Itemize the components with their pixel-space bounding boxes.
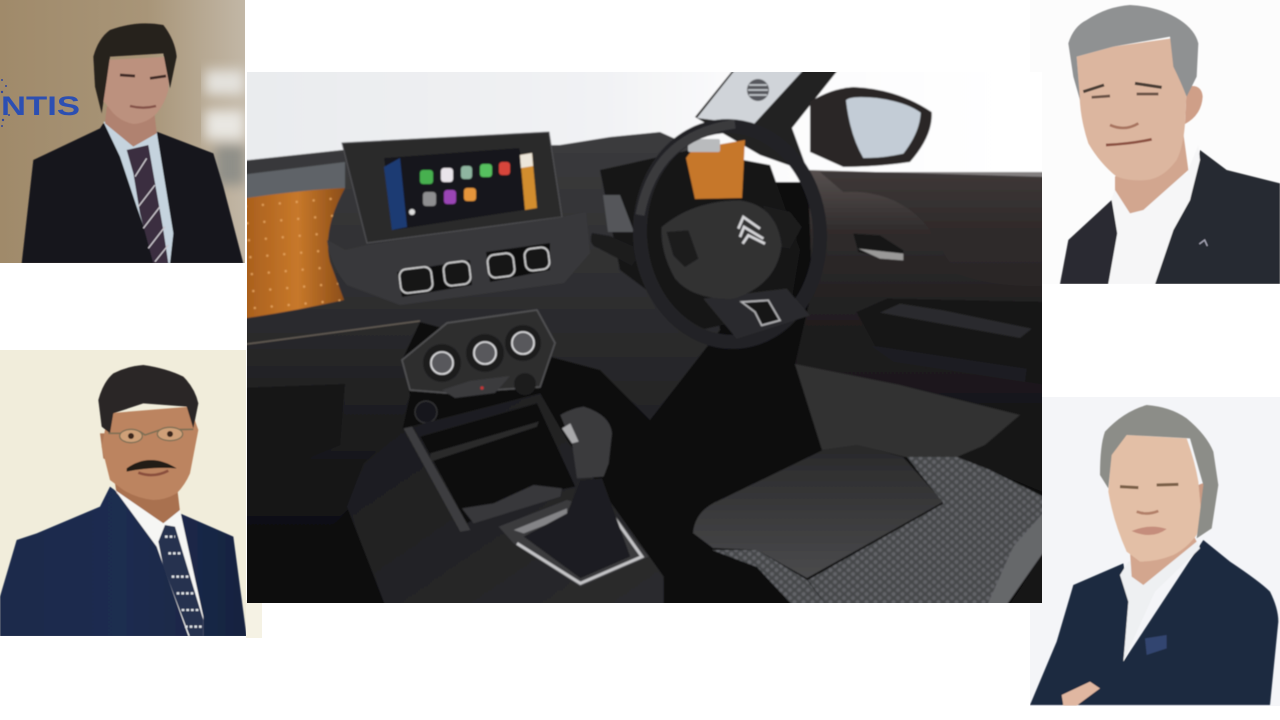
- button: [514, 373, 536, 395]
- glovebox: [240, 384, 345, 485]
- shirt: [1108, 145, 1200, 284]
- air vents: [397, 243, 550, 297]
- tie: [158, 525, 203, 637]
- console tray: [420, 403, 575, 523]
- logo text: NTIS: [1, 91, 80, 121]
- jacket right: [1155, 150, 1280, 284]
- lower spoke: [703, 289, 810, 339]
- orange trim behind wheel: [686, 140, 745, 199]
- wing mirror: [810, 87, 932, 167]
- tie: [127, 145, 168, 263]
- window switches: [880, 304, 1032, 338]
- hair: [1068, 5, 1198, 100]
- cup holder: [462, 485, 562, 523]
- pocket square: [1145, 635, 1167, 655]
- logo dots: [1, 79, 10, 127]
- seat leather: [693, 445, 943, 578]
- trim line: [240, 321, 420, 345]
- upper dashboard: [240, 132, 720, 420]
- mouth: [1106, 139, 1152, 145]
- lower left dashboard: [240, 322, 420, 560]
- hazard switch: [442, 376, 510, 398]
- a-pillar: [695, 65, 842, 172]
- hair: [1100, 405, 1218, 538]
- grey dash strip: [240, 162, 345, 199]
- icon: speaker grille: [747, 79, 769, 101]
- mirror glass: [846, 97, 921, 158]
- shirt: [103, 122, 173, 263]
- hair: [93, 23, 177, 113]
- door armrest: [857, 299, 1050, 385]
- eyes: [120, 75, 166, 78]
- icon: chevron logo: [738, 217, 765, 244]
- gear knob: [560, 407, 612, 478]
- shirt: [115, 490, 203, 636]
- touchscreen: [342, 132, 562, 243]
- cluster and wheel backdrop: [600, 150, 800, 330]
- mouth: [138, 471, 168, 475]
- photo: bottom right executive: [1030, 397, 1280, 706]
- hair: [98, 365, 198, 433]
- climate control panel: [402, 310, 555, 423]
- eyes and brows: [1083, 83, 1162, 92]
- seat fabric: [808, 457, 1050, 610]
- photo: car interior: [240, 65, 1050, 610]
- hub: [661, 200, 782, 299]
- door handle recess: [853, 234, 903, 260]
- left switches: [667, 230, 698, 267]
- neck: [115, 483, 180, 523]
- face: [1077, 38, 1187, 180]
- nose shadow: [1137, 511, 1158, 514]
- glasses: [108, 429, 193, 435]
- ear: [1185, 86, 1203, 124]
- seat: [693, 445, 1050, 610]
- jacket: [1030, 540, 1278, 705]
- hand and cuff: [1062, 682, 1100, 706]
- app icons: [420, 170, 433, 184]
- suit: [22, 123, 243, 263]
- face: [1108, 435, 1202, 562]
- moustache: [127, 460, 177, 472]
- badge: [1199, 240, 1207, 246]
- gear bezel: [499, 500, 649, 587]
- face: [102, 407, 198, 500]
- ear: [100, 433, 108, 460]
- seat bolster: [712, 550, 830, 610]
- shirt: [1120, 540, 1200, 662]
- neck: [105, 103, 157, 147]
- console edge: [404, 427, 470, 532]
- nose shadow: [1110, 123, 1138, 128]
- mouth: [130, 106, 156, 108]
- background lights: [205, 70, 245, 185]
- photo: top right executive: [1059, 4, 1280, 284]
- door handle: [858, 249, 903, 260]
- eyes: [1120, 484, 1178, 488]
- neck: [1130, 535, 1197, 585]
- vent housing: [327, 212, 590, 305]
- side door: [795, 170, 1050, 470]
- door pocket: [870, 345, 1027, 382]
- lower door fabric: [795, 364, 1020, 457]
- indicator stalk: [591, 233, 642, 266]
- windscreen and side window background: [240, 65, 1050, 182]
- suit: [0, 487, 247, 637]
- neck: [1115, 133, 1188, 213]
- mouth: [1132, 527, 1167, 535]
- jacket left: [1060, 200, 1117, 284]
- steering wheel: [633, 120, 827, 348]
- ear: [1198, 483, 1212, 520]
- centre console body: [347, 393, 664, 610]
- face: [95, 57, 170, 124]
- photo: top left executive: [0, 0, 245, 263]
- gear boot: [524, 478, 630, 578]
- right switches: [763, 205, 802, 249]
- photo: bottom left executive: [0, 350, 262, 638]
- orange dash trim: [240, 188, 345, 319]
- usb port: [415, 401, 437, 423]
- door shaping: [820, 172, 1050, 286]
